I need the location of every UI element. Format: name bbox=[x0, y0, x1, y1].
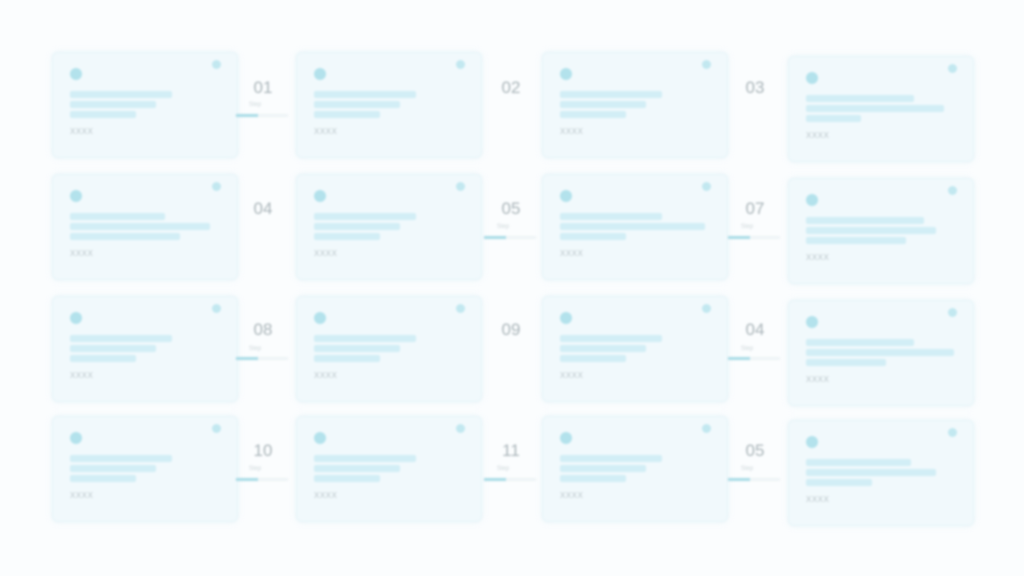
card r3c3: XXXX bbox=[560, 371, 583, 380]
card r2c3 bbox=[542, 174, 728, 280]
card r4c2: XXXX bbox=[314, 491, 337, 500]
card r3c2 bbox=[296, 296, 482, 402]
step markers: Step bbox=[497, 466, 509, 472]
card r4c2 bbox=[296, 416, 482, 522]
card r4c3: XXXX bbox=[560, 491, 583, 500]
card r1c2: XXXX bbox=[314, 127, 337, 136]
card r2c4 bbox=[788, 178, 974, 284]
step 01: 01 bbox=[254, 78, 272, 97]
step 02: 02 bbox=[502, 78, 520, 97]
step markers: Step bbox=[249, 466, 261, 472]
step 04: 04 bbox=[254, 199, 272, 218]
step 08: 08 bbox=[254, 320, 272, 339]
step 07: 07 bbox=[746, 199, 764, 218]
card r2c1: XXXX bbox=[70, 249, 93, 258]
card r4c3 bbox=[542, 416, 728, 522]
card r4c4: XXXX bbox=[806, 495, 829, 504]
card r3c4: XXXX bbox=[806, 375, 829, 384]
card r2c4: XXXX bbox=[806, 253, 829, 262]
step markers: Step bbox=[741, 466, 753, 472]
card r1c1 bbox=[52, 52, 238, 158]
card r3c1: XXXX bbox=[70, 371, 93, 380]
card r2c2: XXXX bbox=[314, 249, 337, 258]
step markers: Step bbox=[741, 224, 753, 230]
card r3c2: XXXX bbox=[314, 371, 337, 380]
card r4c1: XXXX bbox=[70, 491, 93, 500]
card r2c2 bbox=[296, 174, 482, 280]
card r1c4: XXXX bbox=[806, 131, 829, 140]
step markers: Step bbox=[249, 346, 261, 352]
step 10: 10 bbox=[254, 441, 272, 460]
step markers: Step bbox=[497, 224, 509, 230]
card r1c1: XXXX bbox=[70, 127, 93, 136]
step markers: Step bbox=[741, 346, 753, 352]
card r1c3: XXXX bbox=[560, 127, 583, 136]
card r1c2 bbox=[296, 52, 482, 158]
step 09: 09 bbox=[502, 320, 520, 339]
step markers: Step bbox=[249, 102, 261, 108]
step 05: 05 bbox=[502, 199, 520, 218]
step 11: 11 bbox=[502, 441, 520, 460]
card r2c3: XXXX bbox=[560, 249, 583, 258]
step 03: 03 bbox=[746, 78, 764, 97]
step 04 right: 04 bbox=[746, 320, 764, 339]
card r2c1 bbox=[52, 174, 238, 280]
card r3c1 bbox=[52, 296, 238, 402]
card r4c4 bbox=[788, 420, 974, 526]
card r3c4 bbox=[788, 300, 974, 406]
step markers bbox=[235, 78, 779, 482]
card r4c1 bbox=[52, 416, 238, 522]
step 05 right: 05 bbox=[746, 441, 764, 460]
card r3c3 bbox=[542, 296, 728, 402]
card r1c3 bbox=[542, 52, 728, 158]
card r1c4 bbox=[788, 56, 974, 162]
